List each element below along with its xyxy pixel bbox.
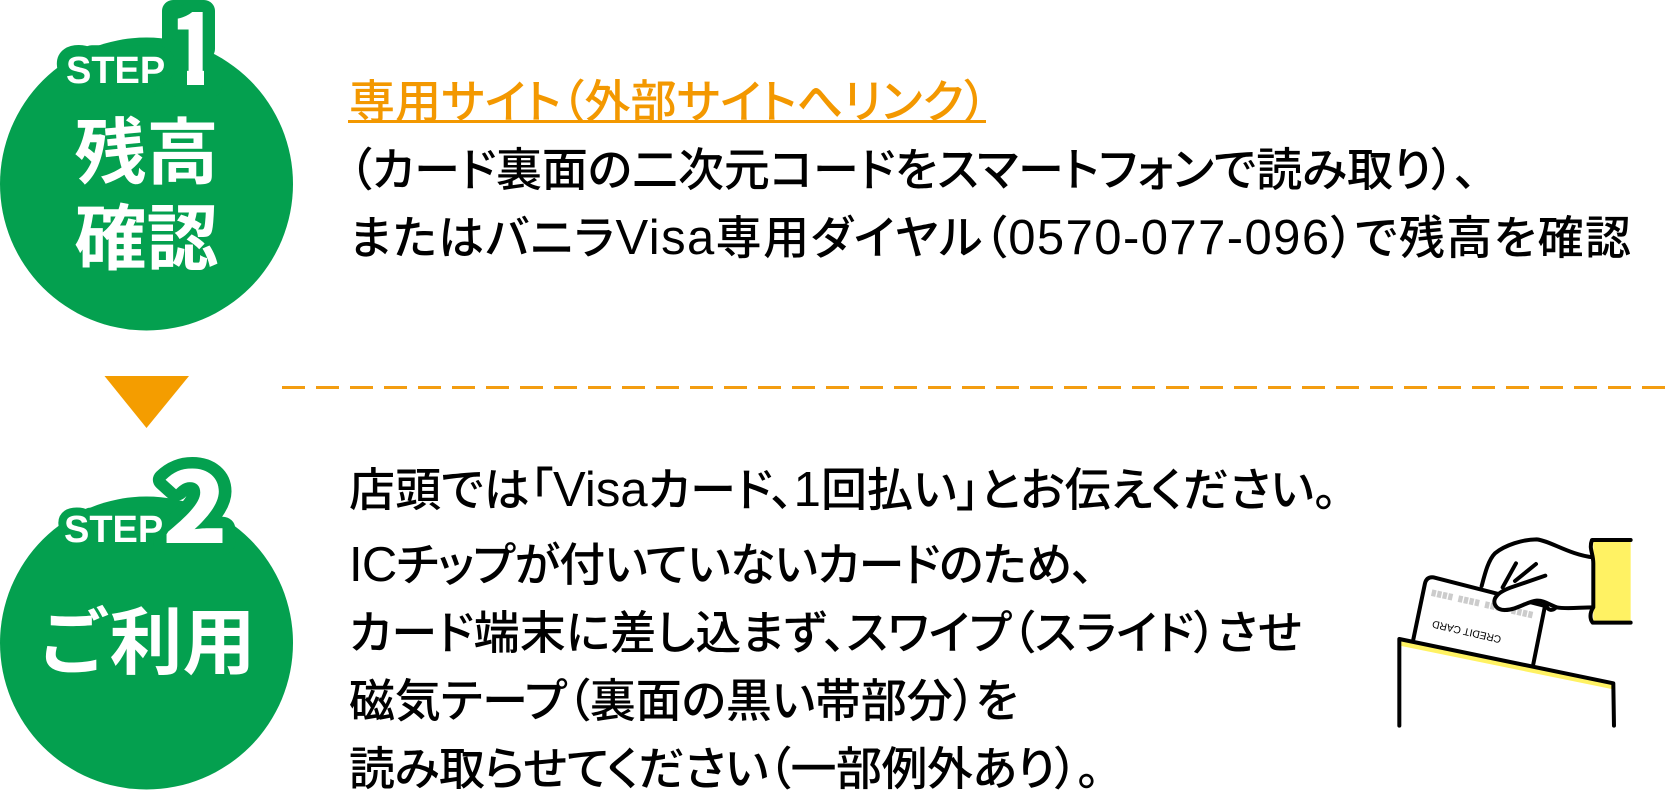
card: CREDIT CARD <box>1431 618 1502 644</box>
divider <box>282 386 1666 389</box>
cuff <box>1590 540 1631 623</box>
step 1 link text: 専用サイト（外部サイトへリンク） <box>349 66 987 132</box>
step 2 text line 2: ICチップが付いていないカードのため、 <box>349 538 1094 592</box>
step 1 badge <box>0 0 293 330</box>
terminal slot <box>1399 639 1614 726</box>
step 2 text line 3: カード端末に差し込まず、スワイプ（スライド）させ <box>349 597 1302 663</box>
step title: 残高 <box>74 94 219 199</box>
step 2 text line 4: 磁気テープ（裏面の黒い帯部分）を <box>349 665 1018 731</box>
step label: STEP <box>66 50 165 92</box>
step 1 text line 2: （カード裏面の二次元コードをスマートフォンで読み取り）、 <box>349 134 1477 200</box>
step label: STEP <box>64 509 163 551</box>
badge circle <box>0 496 293 790</box>
step 2 badge <box>0 430 293 790</box>
step number: 2 <box>162 430 228 572</box>
step 1 text line 3: またはバニラVisa専用ダイヤル（0570-077-096）で残高を確認 <box>349 211 1631 265</box>
step title: ご利用 <box>36 584 256 690</box>
step 1 number tab <box>162 0 215 60</box>
illustration: hand swiping card <box>1399 539 1631 726</box>
step 2 text line 1: 店頭では「Visaカード、1回払い」とお伝えください。 <box>349 463 1337 517</box>
number foot mask <box>165 68 215 88</box>
badge circle <box>0 38 293 330</box>
step title line 2: 確認 <box>74 180 219 285</box>
card <box>1413 577 1545 664</box>
hand <box>1482 539 1593 610</box>
arrow <box>104 376 189 428</box>
